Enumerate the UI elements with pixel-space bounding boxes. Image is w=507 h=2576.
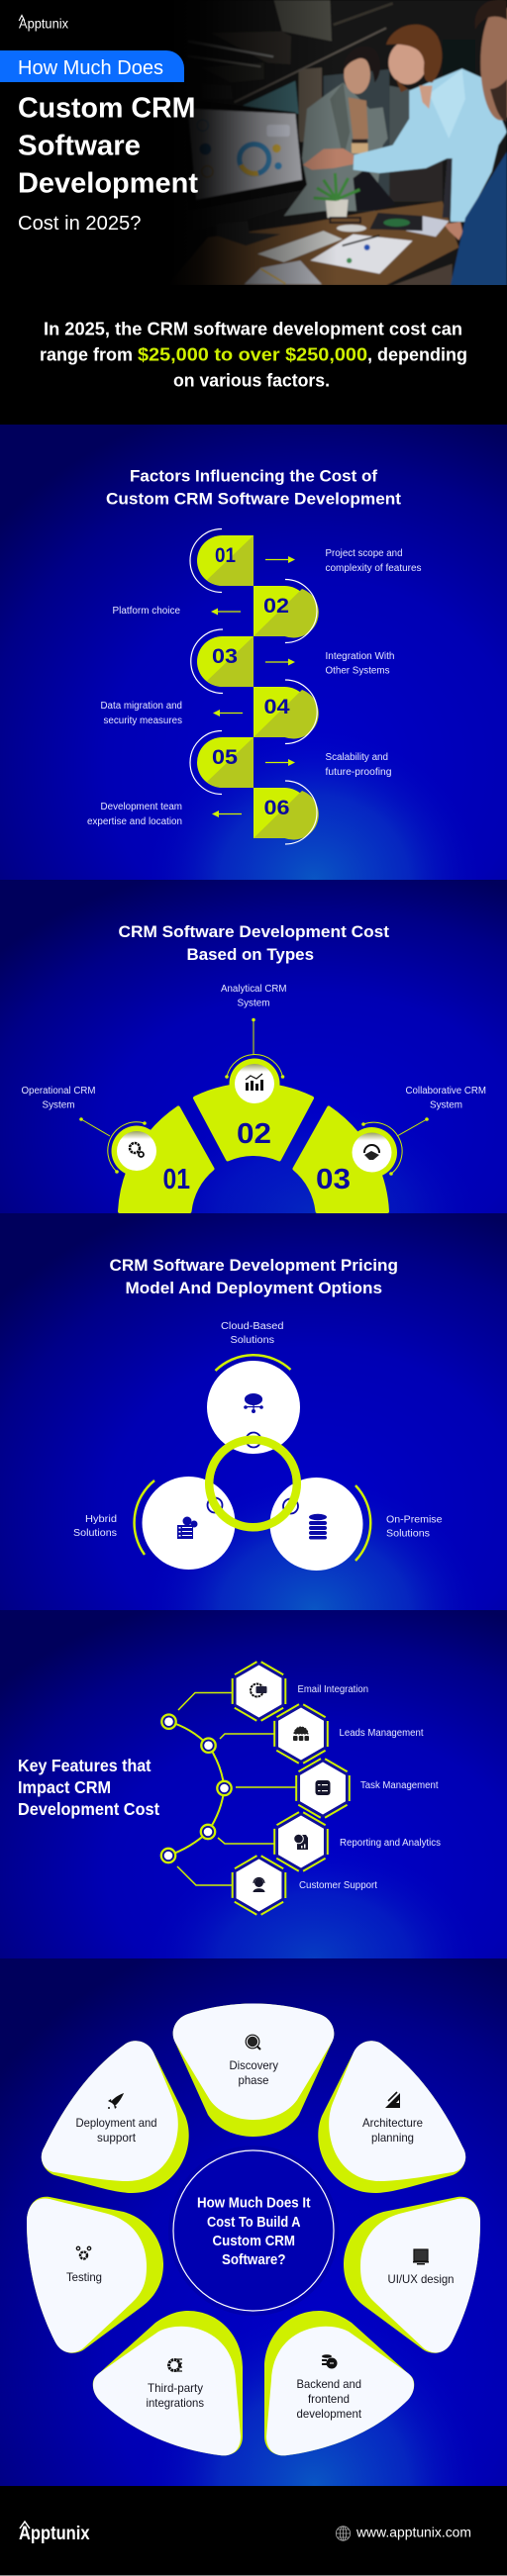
label: on-premise: Solutions — [386, 1528, 430, 1540]
heading: Model And Deployment Options — [125, 1279, 382, 1297]
label 01 — [325, 548, 422, 574]
heading: Based on Types — [186, 945, 314, 964]
label: analytical: System — [238, 998, 269, 1009]
step 06 — [254, 781, 319, 844]
petal: discovery phase: phase — [238, 2073, 269, 2087]
panel: key features — [0, 1610, 507, 1958]
title — [18, 93, 198, 235]
icon: ruler and pencil — [385, 2092, 400, 2108]
woman in blue shirt — [354, 68, 507, 222]
step 01: 01 — [215, 544, 236, 567]
center circle — [168, 2146, 339, 2316]
arrow 04 — [213, 710, 243, 716]
wedge 03: collaborative: 03 — [316, 1164, 351, 1195]
icon: monitor — [413, 2249, 429, 2264]
hexagon: reporting and analytics — [274, 1811, 328, 1872]
icon: globe — [336, 2527, 351, 2540]
heading: Custom CRM Software Development — [106, 489, 401, 509]
title: Cost in 2025? — [18, 213, 141, 235]
label 06: expertise and location — [87, 816, 182, 827]
heading — [106, 467, 401, 509]
petal: architecture planning — [318, 2041, 465, 2193]
label 03: Other Systems — [325, 665, 390, 677]
heading: Factors Influencing the Cost of — [130, 467, 377, 485]
step 03: 03 — [212, 645, 238, 668]
label 05: future-proofing — [325, 767, 392, 778]
petal: deployment and support: Deployment and — [75, 2116, 156, 2130]
desk — [168, 201, 458, 285]
center circle: How Much Does It — [197, 2195, 311, 2211]
icon: server with cloud — [177, 1516, 198, 1539]
icon: magnifier — [246, 2035, 260, 2050]
intro paragraph: $25,000 to over $250,000 — [138, 344, 367, 364]
petal: backend and frontend development: Backend and — [297, 2377, 361, 2391]
arrow 02 — [211, 608, 241, 616]
step 01 — [190, 528, 254, 592]
hexagon: leads management — [274, 1703, 328, 1765]
label 05: Scalability and — [325, 752, 388, 763]
label 04: Data migration and — [101, 701, 182, 712]
petal: third-party integrations — [93, 2311, 243, 2455]
panel: how much does it cost to build — [0, 1958, 507, 2486]
arrow 06 — [212, 811, 242, 817]
label: hybrid: Hybrid — [85, 1514, 117, 1525]
petal: architecture planning: Architecture — [362, 2116, 423, 2130]
heading: CRM Software Development Cost — [119, 922, 389, 941]
petal: deployment and support — [42, 2041, 189, 2193]
petal: discovery phase — [173, 2003, 334, 2137]
timeline nodes — [161, 1714, 232, 1862]
center circle: Software? — [222, 2252, 286, 2268]
hero photo: team reviewing a CRM dashboard — [188, 0, 507, 285]
circle: on-premise — [269, 1478, 370, 1571]
petal: architecture planning: planning — [371, 2131, 414, 2145]
label 05 — [325, 752, 392, 778]
petal: testing: Testing — [66, 2270, 102, 2284]
petal: third-party integrations: Third-party — [148, 2381, 203, 2395]
wedge 02: analytical — [195, 1018, 312, 1159]
plant and desk items — [326, 200, 349, 218]
logo: Apptunix — [19, 16, 68, 32]
label: cloud: Cloud-Based — [221, 1321, 283, 1332]
icon: rocket — [108, 2093, 124, 2109]
label 01: Project scope and — [325, 548, 402, 559]
label: cloud — [221, 1321, 283, 1346]
label: customer support: Customer Support — [299, 1880, 377, 1891]
icon: cloud — [244, 1393, 263, 1413]
label: collaborative: Collaborative CRM — [406, 1086, 486, 1097]
title: Development — [18, 168, 198, 200]
woman in grey jacket — [284, 82, 388, 216]
hexagon: task management — [296, 1758, 350, 1819]
label: analytical — [221, 984, 287, 1009]
circle: hybrid — [135, 1477, 236, 1570]
step 03 — [191, 629, 254, 693]
intro paragraph: on various factors. — [173, 370, 330, 390]
label: collaborative: System — [430, 1100, 462, 1110]
wedge 02: analytical: 02 — [237, 1118, 271, 1150]
step 04 — [254, 680, 319, 744]
panel: factors influencing cost — [0, 425, 507, 880]
petal: backend and frontend development: frontend — [308, 2392, 350, 2406]
label: email integration: Email Integration — [297, 1684, 368, 1695]
label: hybrid: Solutions — [73, 1528, 117, 1539]
petal: backend and frontend development: development — [297, 2407, 362, 2421]
hexagon: customer support — [233, 1855, 285, 1916]
heading: CRM Software Development Pricing — [109, 1256, 398, 1275]
circle: cloud-based — [207, 1355, 300, 1454]
icon: database code — [322, 2354, 337, 2369]
petal: discovery phase: Discovery — [230, 2058, 278, 2072]
label: on-premise — [386, 1514, 443, 1540]
step 06: 06 — [263, 797, 289, 819]
petal: testing — [27, 2197, 163, 2353]
arrow 03 — [265, 659, 295, 665]
arrow 05 — [265, 759, 295, 766]
label: hybrid — [73, 1514, 117, 1539]
arrow 01 — [265, 556, 295, 563]
wedge 03: collaborative — [295, 1108, 429, 1211]
petal: backend and frontend development — [264, 2311, 414, 2455]
label: operational — [22, 1086, 95, 1110]
label 06: Development team — [101, 802, 182, 812]
step 04: 04 — [263, 696, 290, 718]
heading: Development Cost — [18, 1799, 159, 1819]
wedge 01: operational: 01 — [162, 1164, 190, 1195]
petal: third-party integrations: integrations — [147, 2396, 204, 2410]
label: cloud: Solutions — [230, 1335, 274, 1346]
panel: cost based on types — [0, 880, 507, 1213]
intro paragraph: , depending — [367, 344, 467, 364]
label 03 — [325, 651, 394, 677]
icon: integration gear — [168, 2359, 182, 2371]
heading — [119, 922, 389, 964]
tag: How Much Does: How Much Does — [18, 56, 163, 79]
label: operational: System — [42, 1100, 75, 1110]
intro paragraph: range from — [40, 344, 133, 364]
intro paragraph — [40, 319, 467, 390]
panel: hero — [0, 0, 507, 425]
label: operational: Operational CRM — [22, 1086, 95, 1097]
label 02: Platform choice — [113, 606, 180, 617]
wedge 01: operational — [79, 1108, 212, 1211]
tag: How Much Does — [0, 50, 184, 82]
heading: Impact CRM — [18, 1777, 111, 1797]
monitor — [257, 109, 303, 188]
heading — [18, 1756, 159, 1819]
icon: gears — [76, 2246, 91, 2258]
intro paragraph: In 2025, the CRM software development cost can — [44, 319, 462, 338]
heading: Key Features that — [18, 1756, 152, 1775]
label 01: complexity of features — [325, 563, 422, 574]
step 02: 02 — [263, 595, 289, 618]
small connector circles — [208, 1433, 298, 1514]
petal: ui/ux design — [344, 2197, 480, 2353]
hexagon: email integration — [233, 1661, 285, 1722]
icon: report — [294, 1834, 308, 1850]
center circle: Cost To Build A — [207, 2215, 301, 2231]
label 04: security measures — [103, 716, 182, 726]
center circle: Custom CRM — [212, 2234, 295, 2249]
icon: email gear — [251, 1684, 267, 1696]
label 03: Integration With — [325, 651, 394, 662]
panel: pricing model and deployment — [0, 1213, 507, 1610]
label: collaborative — [406, 1086, 486, 1110]
icon: handshake — [364, 1145, 379, 1160]
central ring — [209, 1440, 297, 1527]
icon: team gear — [293, 1727, 309, 1741]
website: www.apptunix.com — [355, 2524, 471, 2539]
icon: headset agent — [254, 1878, 265, 1892]
label: reporting and analytics: Reporting and Analytics — [340, 1838, 441, 1849]
step 02 — [254, 580, 319, 643]
label: leads management: Leads Management — [339, 1728, 424, 1739]
petal: ui/ux design: UI/UX design — [388, 2272, 454, 2286]
label: task management: Task Management — [360, 1780, 439, 1791]
label 06 — [87, 802, 182, 827]
footer logo: Apptunix — [19, 2524, 90, 2544]
connector lines — [177, 1692, 296, 1885]
title: Custom CRM — [18, 93, 196, 125]
step 05: 05 — [212, 746, 238, 769]
icon: bar chart — [246, 1074, 263, 1091]
icon: checklist — [315, 1780, 331, 1795]
petal: deployment and support: support — [97, 2131, 137, 2145]
label 04 — [101, 701, 182, 726]
footer — [0, 2486, 507, 2576]
title: Software — [18, 131, 141, 162]
heading — [109, 1256, 398, 1297]
icon: database — [309, 1514, 327, 1540]
label: analytical: Analytical CRM — [221, 984, 287, 995]
timeline curve — [168, 1722, 224, 1856]
man in foreground — [451, 151, 507, 287]
label: on-premise: On-Premise — [386, 1514, 443, 1526]
step 05 — [190, 730, 254, 794]
icon: gears — [130, 1143, 144, 1157]
